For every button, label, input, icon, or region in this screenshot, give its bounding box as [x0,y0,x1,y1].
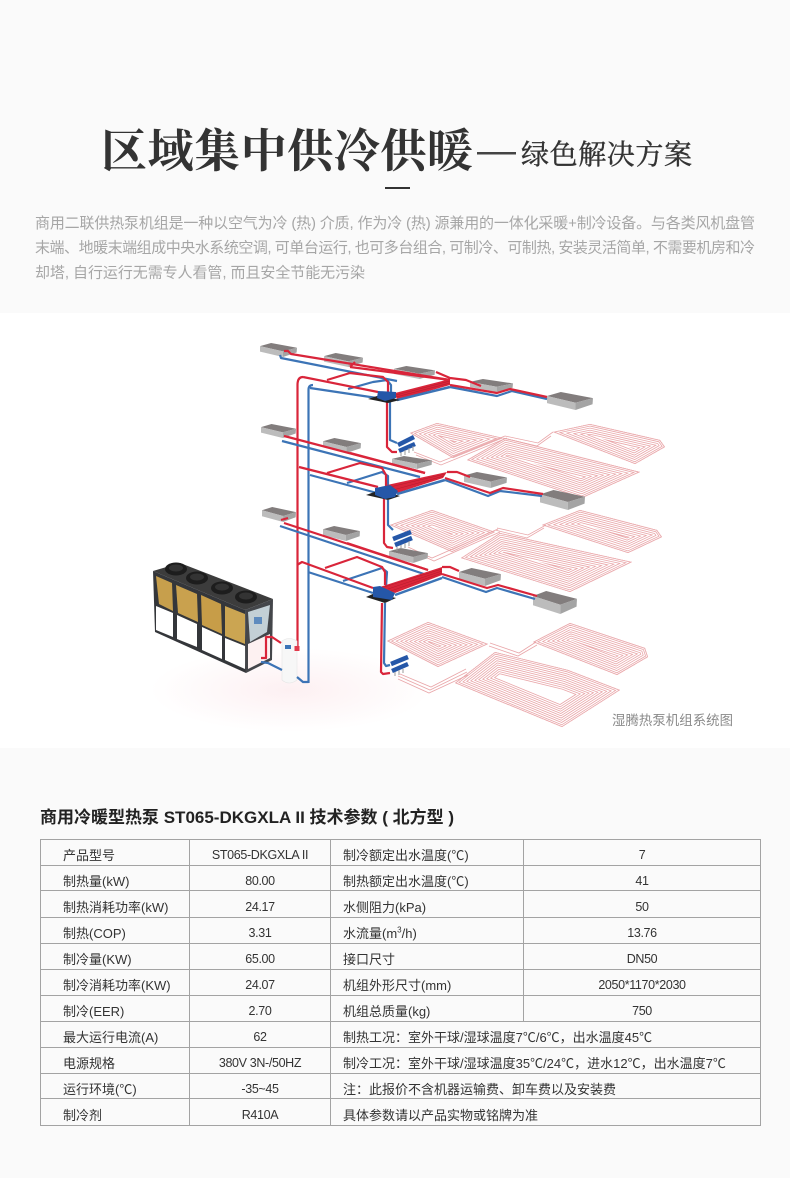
diagram caption: 湿腾热泵机组系统图 [612,712,733,728]
spec table: 62 [253,1030,267,1044]
spec table: 制冷(EER) [63,1004,124,1019]
panel: header [35,126,755,282]
spec table: DN50 [627,952,657,966]
spec table: 制冷消耗功率(KW) [63,978,171,993]
spec table: 制冷工况：室外干球/湿球温度35℃/24℃，进水12℃，出水温度7℃ [343,1056,726,1071]
water manifold: top floor [368,391,400,403]
floor heating distributor: ground floor [391,657,408,676]
fan coil unit 14 [459,568,501,586]
spec table: 产品型号 [63,848,115,863]
spec table: 运行环境(℃) [63,1082,137,1096]
spec table: R410A [242,1108,278,1122]
spec table: 水流量(m3/h) [343,926,417,941]
panel: system diagram [153,343,732,727]
spec table: 制冷额定出水温度(℃) [343,848,469,863]
spec table: 65.00 [245,952,275,966]
spec table: 具体参数请以产品实物或铭牌为准 [343,1108,538,1122]
spec table: 制冷量(KW) [63,952,132,967]
spec table: 电源规格 [63,1056,115,1071]
spec table: 24.07 [245,978,275,992]
spec table: 最大运行电流(A) [63,1030,158,1045]
fan coil unit 10 [540,490,585,510]
spec table: 制热量(kW) [63,874,129,888]
fan coil unit 2 [324,353,363,367]
spec table: 2050*1170*2030 [598,978,686,992]
spec table: 制冷剂 [63,1108,102,1122]
spec table: 750 [632,1004,652,1018]
water tank [282,638,297,683]
red riser pipe [298,377,303,651]
fan coil unit 4 [470,379,513,392]
spec table: 13.76 [627,926,657,940]
spec table: 制热额定出水温度(℃) [343,874,469,888]
heading rule [385,187,410,189]
heat pump unit [153,562,273,673]
floor heating coils: middle floor [390,510,662,592]
spec table: 24.17 [245,900,275,914]
fan coil unit 3 [394,366,435,379]
connecting pipes: heat pump to tank [261,637,308,682]
spec table: 50 [635,900,649,914]
spec table: ST065-DKGXLA II [212,848,308,862]
fan coil unit 5 [547,392,593,410]
water manifold: middle floor [366,485,400,500]
floor heating coils: upper floor [410,423,665,498]
spec table: 水侧阻力(kPa) [343,900,426,914]
intro paragraph: 却塔, 自行运行无需专人看管, 而且安全节能无污染 [35,264,365,282]
spec table: 注：此报价不含机器运输费、卸车费以及安装费 [343,1082,616,1096]
spec table: 制热(COP) [63,926,126,941]
pipes: ground floor [280,518,537,674]
spec table: 7 [639,848,645,862]
spec table [40,839,761,1126]
spec table: 机组外形尺寸(mm) [343,978,451,993]
spec table: -35~45 [241,1082,279,1096]
fan coil unit 11 [262,507,296,522]
spec table: 制热消耗功率(kW) [63,900,168,914]
intro paragraph [35,214,755,282]
intro paragraph: 末端、地暖末端组成中央水系统空调, 可单台运行, 也可多台组合, 可制冷、可制热, 安装灵活简单, 不需要机房和冷 [35,240,755,256]
table heading: 商用冷暖型热泵 ST065-DKGXLA II 技术参数 ( 北方型 ) [40,808,454,827]
pipes: top floor [280,351,547,452]
subtitle: 绿色解决方案 [521,139,692,171]
spec table: 41 [635,874,649,888]
spec table: 制热工况：室外干球/湿球温度7℃/6℃，出水温度45℃ [343,1030,652,1045]
spec table: 380V 3N-/50HZ [219,1056,301,1070]
floor heating coils: ground floor [387,622,648,727]
title dash [477,152,516,154]
spec table: 3.31 [249,926,271,940]
intro paragraph: 商用二联供热泵机组是一种以空气为冷 (热) 介质, 作为冷 (热) 源兼用的一体化采暖+制冷设备。与各类风机盘管 [35,214,755,232]
blue riser pipe [308,385,313,683]
spec table: 机组总质量(kg) [343,1004,430,1019]
pipes: middle floor [282,436,543,548]
fan coil unit 7 [323,438,361,453]
fan coil unit 15 [533,591,577,614]
fan coil unit 6 [261,424,296,438]
title: 区域集中供冷供暖 [101,126,473,177]
fan coil unit 1 [260,343,297,357]
coil feeder lines [398,432,553,693]
floor heating distributor: middle floor [393,532,412,551]
floor heating distributor: top floor [398,437,415,456]
spec table: 2.70 [249,1004,271,1018]
spec table: 接口尺寸 [343,952,395,967]
fan coil unit 12 [323,526,360,541]
floor shadow [150,648,430,732]
spec table: 80.00 [245,874,275,888]
fan coil unit 9 [464,472,507,488]
fan coil unit 8 [392,456,432,469]
water manifold: ground floor [366,586,396,603]
fan coil unit 13 [389,548,428,563]
